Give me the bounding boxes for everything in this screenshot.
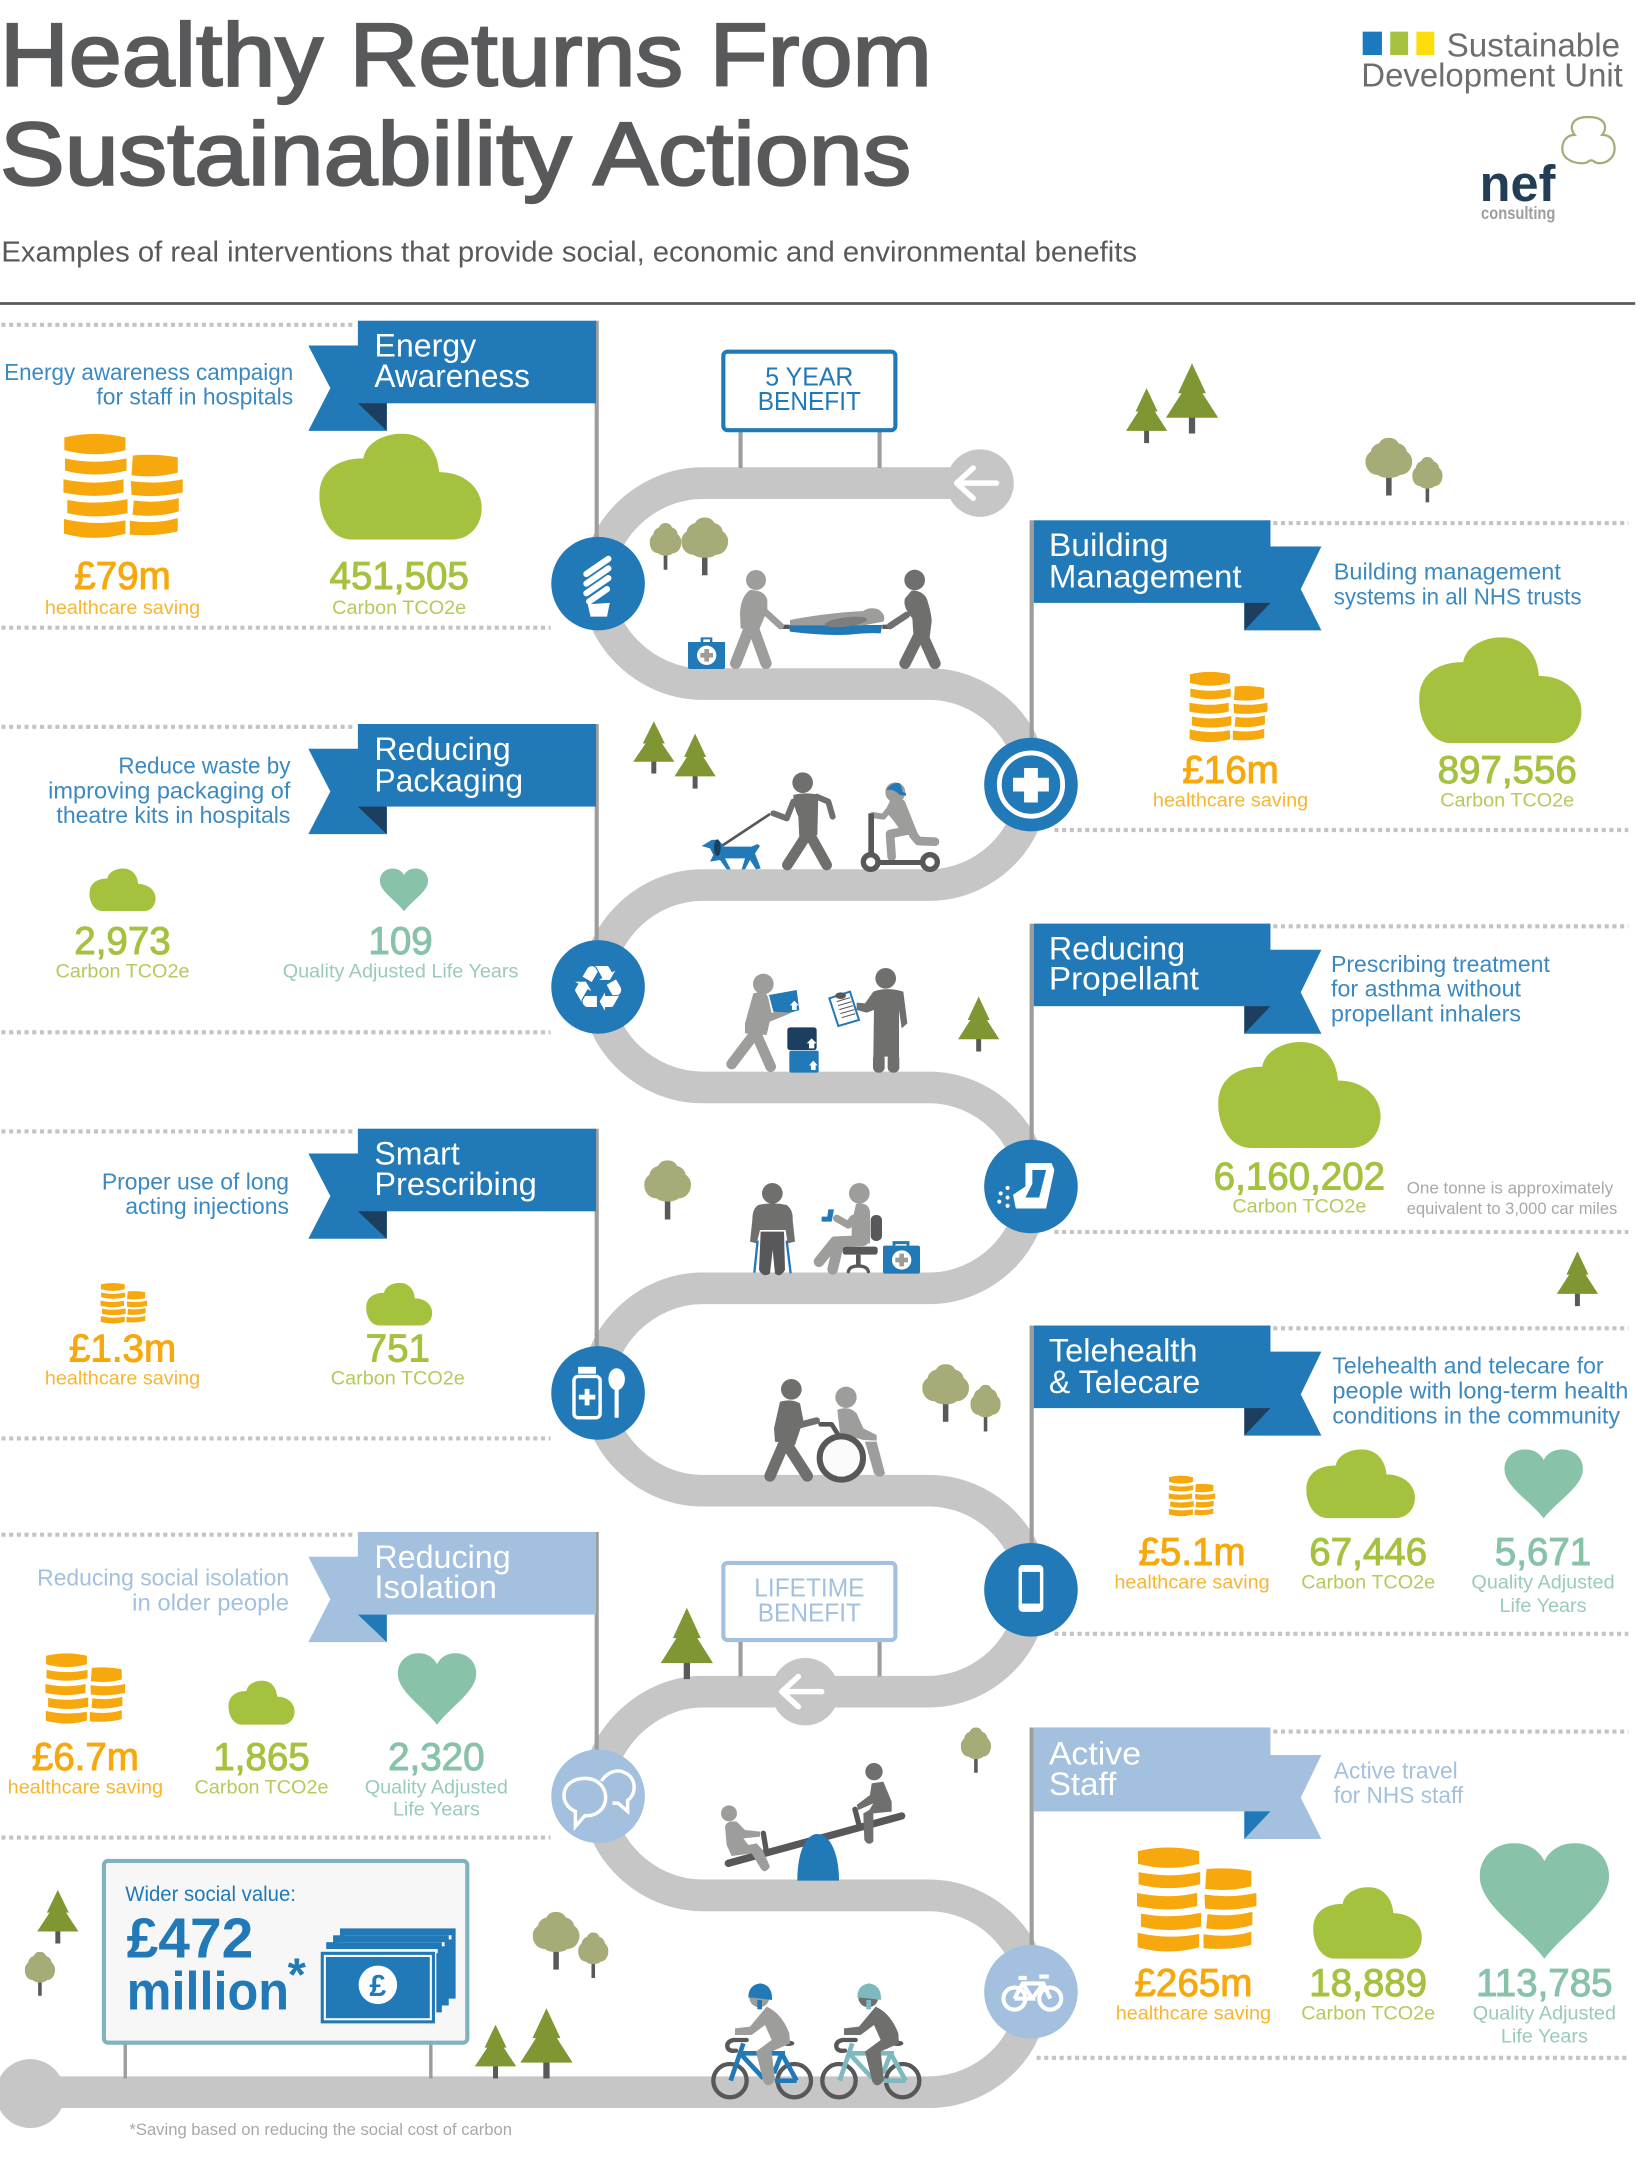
panel: active staff: [1034, 1727, 1628, 2058]
icon: coins: [1137, 1848, 1256, 1952]
description: for NHS staff: [1334, 1782, 1464, 1808]
stat: carbon: [56, 920, 190, 982]
stat: healthcare saving: [8, 1736, 163, 1799]
icon: cloud: [89, 869, 156, 911]
icon: cloud: [319, 434, 482, 540]
stat: carbon: [1301, 1531, 1435, 1593]
stat: carbon: [1301, 1962, 1435, 2024]
icon: mobile phone: [984, 1543, 1078, 1637]
description: Telehealth and telecare for: [1332, 1353, 1604, 1379]
stat: carbon: 751: [366, 1327, 430, 1370]
stat: quality adjusted life years: [283, 920, 518, 982]
sign: 5 year benefit: BENEFIT: [758, 386, 861, 416]
description: Prescribing treatment: [1331, 951, 1551, 977]
logo: Sustainable Development Unit: Sustainable: [1447, 26, 1620, 63]
scene: stretcher: [688, 570, 935, 669]
banner: telehealth and telecare: & Telecare: [1049, 1364, 1200, 1400]
icon: coins: [1189, 672, 1267, 742]
stat: quality adjusted life years: Quality Adjusted: [1473, 2002, 1616, 2024]
subtitle: Examples of real interventions that provide social, economic and environmental benefits: [1, 237, 1137, 269]
stat: carbon: 897,556: [1438, 749, 1577, 792]
banner: reducing packaging: Packaging: [374, 762, 523, 798]
footnote: *Saving based on reducing the social cost of carbon: [129, 2121, 512, 2139]
sign: lifetime benefit: LIFETIME: [754, 1573, 864, 1603]
banner: building management: [1034, 520, 1321, 630]
icon: recycling: ♻: [570, 951, 626, 1025]
stat: healthcare saving: [45, 1327, 200, 1390]
banner: building management: Management: [1049, 559, 1242, 595]
banner: building management: Building: [1049, 527, 1169, 563]
stat: healthcare saving: healthcare saving: [1116, 2002, 1271, 2024]
description: acting injections: [125, 1193, 289, 1219]
description: conditions in the community: [1332, 1402, 1621, 1428]
logo: Sustainable Development Unit: Development Unit: [1361, 57, 1623, 94]
sign: wider social value: million: [127, 1962, 289, 2022]
banner: reducing packaging: Reducing: [374, 731, 511, 767]
title: Sustainability Actions: [0, 103, 911, 203]
stat: quality adjusted life years: 109: [368, 920, 433, 963]
panel: building management: [1034, 520, 1628, 830]
sign: lifetime benefit: BENEFIT: [758, 1597, 861, 1627]
banner: energy awareness: Awareness: [374, 358, 530, 394]
banner: active staff: Active: [1049, 1736, 1141, 1772]
banner: energy awareness: [308, 321, 596, 431]
logo: nef consulting: consulting: [1481, 203, 1555, 223]
stat: quality adjusted life years: 2,320: [388, 1736, 485, 1779]
sign: lifetime benefit: [723, 1563, 895, 1677]
banner: reducing propellant: Reducing: [1049, 930, 1185, 966]
description: in older people: [132, 1589, 289, 1615]
banner: energy awareness: Energy: [374, 328, 477, 364]
description: [1331, 951, 1551, 1026]
stat: carbon: Carbon TCO2e: [1301, 1571, 1435, 1593]
scene: wheelchair: [770, 1379, 885, 1480]
note: car miles: equivalent to 3,000 car miles: [1407, 1200, 1617, 1218]
banner: active staff: Staff: [1049, 1766, 1117, 1802]
stat: carbon: Carbon TCO2e: [331, 1368, 465, 1390]
icon: heart: [1480, 1843, 1609, 1959]
sign: 5 year benefit: 5 YEAR: [765, 361, 853, 391]
stat: quality adjusted life years: Quality Adjusted: [1471, 1571, 1615, 1593]
stat: healthcare saving: [1116, 1962, 1271, 2024]
icon: cloud: [1313, 1887, 1422, 1959]
stat: quality adjusted life years: 5,671: [1495, 1531, 1591, 1574]
panel: reducing propellant: [1034, 924, 1628, 1232]
description: Active travel: [1334, 1757, 1458, 1783]
stat: carbon: [1438, 749, 1577, 812]
logo: Sustainable Development Unit: [1361, 26, 1623, 94]
stat: carbon: 18,889: [1309, 1962, 1427, 2005]
stat: carbon: 67,446: [1309, 1531, 1427, 1574]
description: [48, 753, 291, 828]
icon: cloud: [228, 1681, 295, 1725]
icon: speech bubbles: [551, 1749, 645, 1843]
stat: quality adjusted life years: 113,785: [1476, 1962, 1613, 2005]
icon: coins: [100, 1283, 147, 1324]
road: [0, 449, 1032, 2128]
scene: dog walker and scooter: [702, 772, 937, 869]
scene: carrying boxes: [732, 968, 907, 1073]
logo: nef consulting: [1480, 117, 1615, 223]
icon: banknotes: [319, 1928, 456, 2023]
banner: reducing isolation: [308, 1532, 596, 1642]
stat: carbon: Carbon TCO2e: [56, 960, 190, 982]
icon: medical cross: [984, 738, 1078, 831]
description: Reduce waste by: [118, 753, 291, 779]
description: [1332, 1353, 1628, 1428]
stat: carbon: 2,973: [74, 920, 171, 963]
banner: reducing propellant: [1034, 924, 1321, 1034]
note: car miles: One tonne is approximately: [1407, 1179, 1614, 1197]
stat: carbon: Carbon TCO2e: [1301, 2002, 1435, 2024]
stat: healthcare saving: healthcare saving: [1153, 790, 1308, 812]
banner: reducing packaging: [308, 724, 596, 834]
stat: quality adjusted life years: Quality Adjusted Life Years: [283, 960, 518, 982]
stat: quality adjusted life years: Life Years: [393, 1799, 480, 1821]
stat: carbon: 451,505: [330, 555, 469, 598]
stat: carbon: [195, 1736, 329, 1799]
stat: carbon: 6,160,202: [1214, 1155, 1385, 1198]
icon: heart: [398, 1653, 476, 1725]
stat: healthcare saving: £265m: [1134, 1962, 1252, 2005]
description: theatre kits in hospitals: [56, 802, 290, 828]
description: Reducing social isolation: [37, 1565, 289, 1591]
description: [1334, 1757, 1464, 1808]
title: Healthy Returns From: [0, 4, 932, 104]
stat: healthcare saving: [1153, 749, 1308, 812]
description: improving packaging of: [48, 777, 291, 803]
description: systems in all NHS trusts: [1334, 583, 1582, 609]
stat: healthcare saving: £16m: [1182, 749, 1279, 792]
banner: reducing isolation: Reducing: [374, 1539, 511, 1575]
description: [1334, 558, 1582, 609]
stat: healthcare saving: [45, 555, 200, 619]
sign: wider social value: £472: [127, 1906, 253, 1969]
banner: reducing propellant: Propellant: [1049, 961, 1199, 997]
note: car miles: [1407, 1179, 1617, 1218]
stat: carbon: Carbon TCO2e: [195, 1777, 329, 1799]
stat: quality adjusted life years: [365, 1736, 508, 1821]
icon: cloud: [1218, 1042, 1381, 1148]
trees: [25, 363, 1598, 2078]
icon: light bulb: [551, 537, 645, 630]
stat: carbon: Carbon TCO2e: [332, 597, 466, 619]
icon: medicine and spoon: [551, 1346, 645, 1440]
banner: telehealth and telecare: Telehealth: [1049, 1332, 1198, 1368]
banner: reducing isolation: Isolation: [374, 1569, 497, 1605]
panel: telehealth and telecare: [1034, 1326, 1628, 1634]
scene: doctor and patient: [750, 1183, 920, 1275]
panel: reducing isolation: [1, 1532, 596, 1838]
banner: smart prescribing: Smart: [374, 1135, 460, 1171]
icon: heart: [1504, 1449, 1583, 1518]
stat: healthcare saving: healthcare saving: [1114, 1571, 1270, 1593]
stat: carbon: [1214, 1155, 1385, 1218]
stat: quality adjusted life years: [1473, 1962, 1616, 2048]
stat: quality adjusted life years: Quality Adjusted: [365, 1777, 508, 1799]
icon: recycling: [551, 940, 645, 1034]
panel: smart prescribing: [1, 1129, 596, 1438]
banner: smart prescribing: [308, 1129, 596, 1239]
stat: healthcare saving: healthcare saving: [45, 597, 200, 619]
icon: heart: [380, 869, 428, 911]
description: people with long-term health: [1332, 1377, 1628, 1403]
icon: banknotes: £: [369, 1970, 386, 2003]
sign: wider social value: *: [288, 1948, 307, 2000]
banner: smart prescribing: Prescribing: [374, 1166, 537, 1202]
icon: coins: [1169, 1476, 1215, 1516]
panel: energy awareness: [1, 321, 596, 628]
icon: coins: [63, 434, 183, 538]
stat: quality adjusted life years: Life Years: [1499, 1595, 1587, 1617]
description: for staff in hospitals: [96, 384, 293, 410]
description: Building management: [1334, 558, 1562, 584]
stat: healthcare saving: healthcare saving: [8, 1777, 163, 1799]
description: [37, 1565, 289, 1615]
description: for asthma without: [1331, 976, 1522, 1002]
icon: inhaler: [984, 1140, 1078, 1233]
description: Proper use of long: [102, 1168, 289, 1194]
description: [102, 1168, 289, 1219]
scene: cyclists: [713, 1983, 919, 2097]
sign: wider social value: [104, 1861, 467, 2078]
banner: telehealth and telecare: [1034, 1326, 1321, 1436]
description: [4, 359, 293, 410]
description: propellant inhalers: [1331, 1000, 1521, 1026]
stat: quality adjusted life years: [1471, 1531, 1615, 1617]
icon: cloud: [1419, 637, 1582, 743]
stat: healthcare saving: £6.7m: [32, 1736, 139, 1779]
stat: carbon: [331, 1327, 465, 1390]
sign: wider social value: Wider social value:: [125, 1882, 296, 1906]
stat: carbon: Carbon TCO2e: [1440, 790, 1574, 812]
icon: cloud: [1306, 1449, 1415, 1518]
stat: carbon: Carbon TCO2e: [1232, 1196, 1366, 1218]
stat: quality adjusted life years: Life Years: [1501, 2026, 1588, 2048]
stat: healthcare saving: [1114, 1531, 1270, 1593]
sign: 5 year benefit: [723, 352, 895, 468]
stat: healthcare saving: £1.3m: [69, 1327, 176, 1370]
stat: healthcare saving: healthcare saving: [45, 1368, 200, 1390]
icon: cloud: [366, 1283, 432, 1326]
description: Energy awareness campaign: [4, 359, 293, 385]
poles: [597, 321, 1032, 1955]
logo: nef consulting: nef: [1480, 155, 1556, 212]
banner: active staff: [1034, 1727, 1321, 1839]
stat: carbon: 1,865: [213, 1736, 310, 1779]
title: [0, 4, 932, 203]
panel: reducing packaging: [1, 724, 596, 1032]
stat: healthcare saving: £5.1m: [1138, 1531, 1246, 1574]
icon: bicycle: [984, 1945, 1078, 2039]
stat: carbon: [330, 555, 469, 619]
stat: healthcare saving: £79m: [74, 555, 171, 598]
icon: coins: [45, 1653, 125, 1724]
scene: seesaw: [721, 1763, 902, 1881]
